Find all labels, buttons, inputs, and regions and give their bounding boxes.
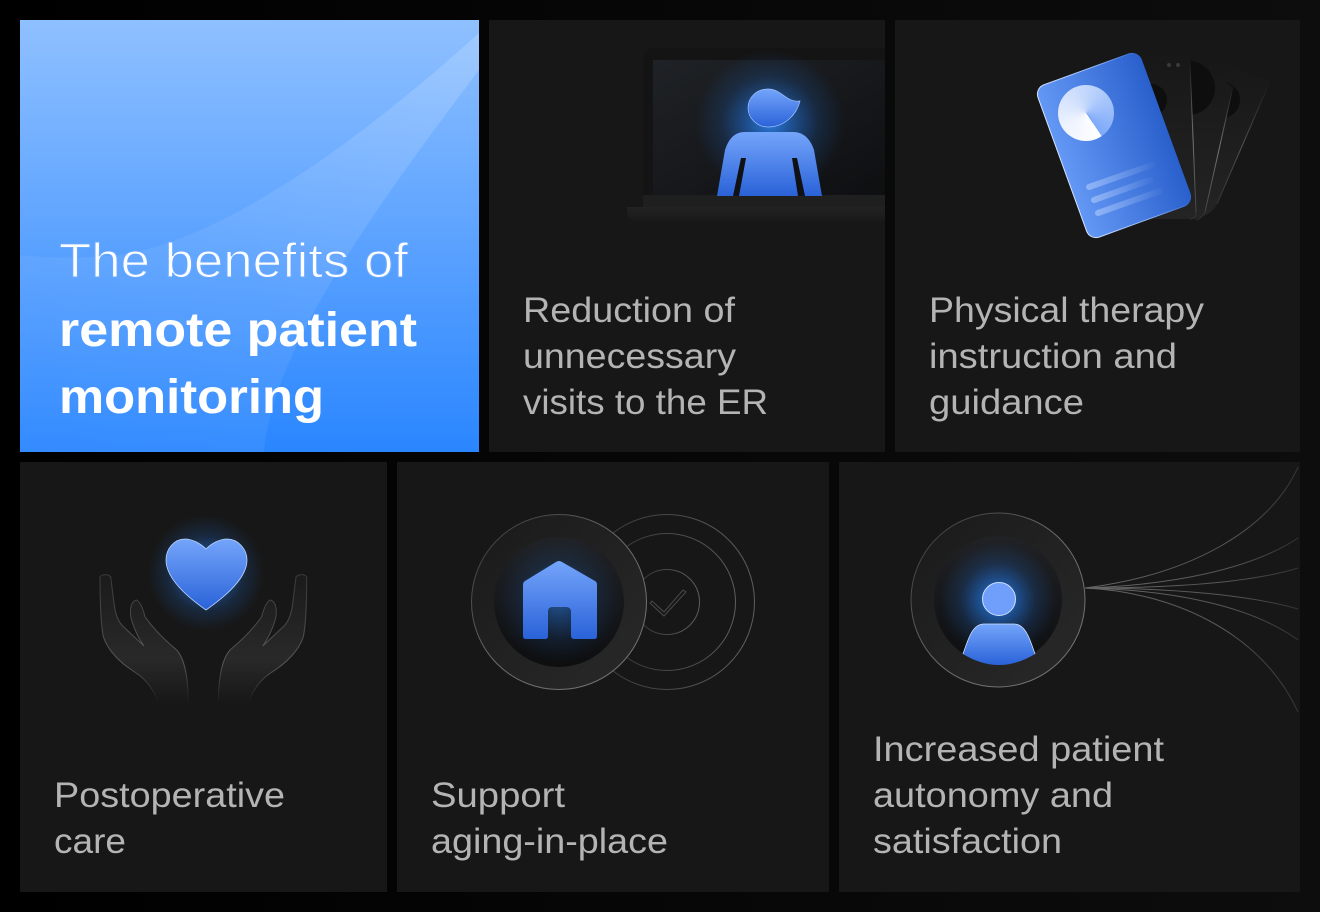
panel: patient autonomy [839,462,1300,892]
fan of lines [1085,467,1298,712]
icon: hands holding heart [100,515,307,703]
icon: check rings [580,514,754,690]
text: reduction of unnecessary visits [523,291,768,422]
text: postoperative care [54,776,285,861]
panel: reduction of ER visits [489,20,885,452]
text: patient autonomy and satisfaction: Increased patient [873,730,1164,769]
icon: laptop with patient [627,58,885,212]
icon: house in circle [472,514,646,690]
heading: remote patient: remote patient [59,304,417,357]
text: postoperative care: Postoperative [54,776,285,815]
heart [166,539,247,610]
text: reduction of unnecessary visits: unnecessary [523,337,737,376]
text: patient autonomy and satisfaction: autonomy and [873,776,1113,815]
text: patient autonomy and satisfaction [873,730,1164,861]
text: support aging-in-place: Support [431,776,565,815]
panel: physical therapy [895,20,1300,452]
text: physical therapy instruction: Physical therapy [929,291,1205,330]
text: reduction of unnecessary visits: visits to the ER [523,383,768,422]
heading: the benefits of: The benefits of [59,235,409,288]
panel: title [20,20,479,452]
text: postoperative care: care [54,822,126,861]
text: physical therapy instruction: instruction and [929,337,1177,376]
panel: postoperative care [20,462,387,892]
text: support aging-in-place [431,776,668,861]
heading: monitoring: monitoring [59,371,324,424]
text: physical therapy instruction: guidance [929,383,1084,422]
icon: person in circle [911,513,1085,687]
left hand [100,575,188,703]
text: reduction of unnecessary visits: Reduction of [523,291,735,330]
text: patient autonomy and satisfaction: satisfaction [873,822,1062,861]
text: support aging-in-place: aging-in-place [431,822,668,861]
text: physical therapy instruction [929,291,1205,422]
icon: fanned therapy cards [1035,50,1270,240]
panel: support aging in place [397,462,829,892]
right hand [218,575,307,703]
